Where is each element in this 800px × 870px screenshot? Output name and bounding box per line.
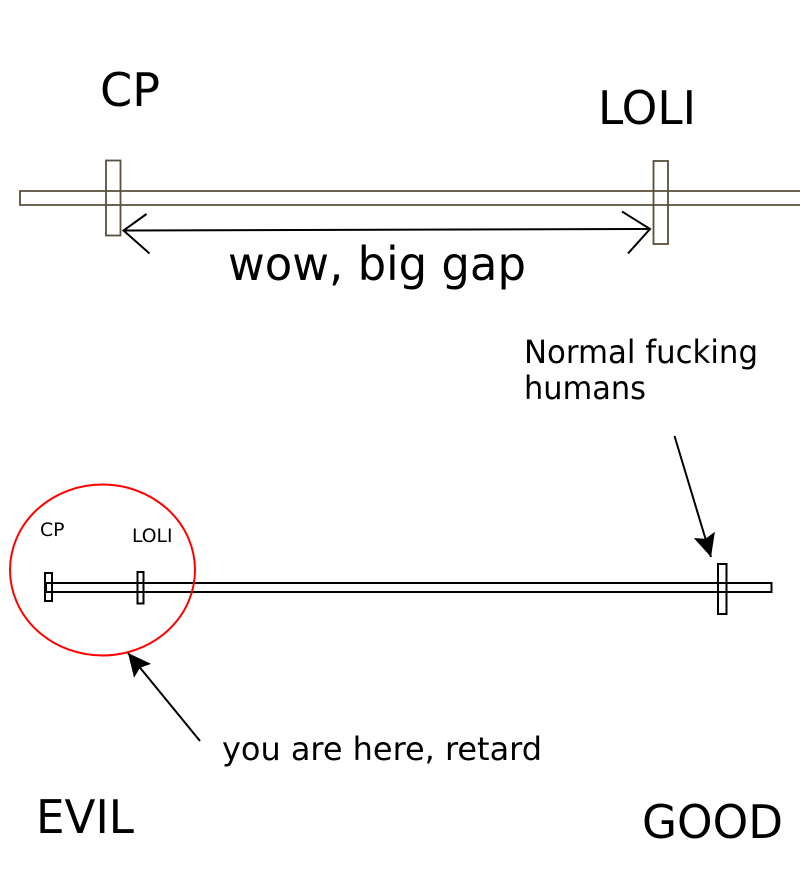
callout: normal humans — [524, 333, 758, 407]
panel: full scale — [10, 333, 783, 849]
full scale bar — [46, 583, 772, 592]
arrow: double-headed gap — [124, 212, 650, 254]
panel: zoomed-in scale — [20, 63, 800, 291]
arrow: to circle — [128, 653, 200, 741]
small CP label: CP — [40, 519, 64, 541]
heading: CP label: CP — [100, 63, 160, 117]
caption: gap: wow, big gap — [228, 237, 526, 291]
axis label: EVIL: EVIL — [36, 790, 134, 844]
marker: LOLI — [654, 161, 668, 244]
red circle — [10, 484, 195, 656]
heading: LOLI label: LOLI — [598, 81, 696, 135]
callout: you are here: you are here, retard — [222, 730, 542, 768]
arrow: to normal humans marker — [674, 436, 711, 557]
small LOLI label: LOLI — [132, 525, 172, 547]
callout: normal humans: humans — [524, 369, 646, 407]
marker: CP — [106, 160, 120, 236]
marker: normal humans — [718, 564, 726, 614]
marker: small LOLI — [138, 572, 144, 604]
marker: small CP — [45, 573, 52, 601]
scale bar — [20, 191, 800, 205]
callout: normal humans: Normal fucking — [524, 333, 758, 371]
axis label: GOOD: GOOD — [642, 795, 783, 849]
